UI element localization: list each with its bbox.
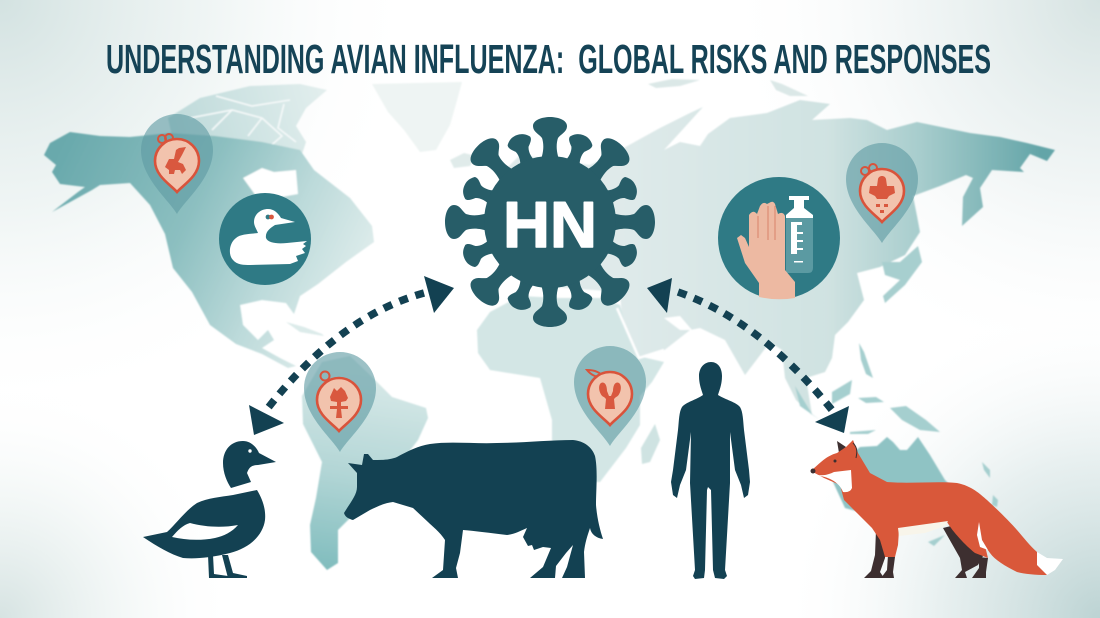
japan and korea: [882, 246, 922, 303]
vial: [786, 196, 813, 273]
africa: [477, 296, 664, 482]
hand: [737, 202, 795, 299]
arrow: virus to fox: [647, 278, 849, 433]
eurasia: [495, 100, 1055, 415]
white tail stripe: [977, 522, 988, 550]
marker: [587, 370, 632, 425]
icon: bird in circle: [219, 193, 311, 285]
arctic canada: [168, 84, 327, 160]
red sea: [617, 308, 664, 358]
new zealand and tasmania: [928, 462, 998, 546]
white tail tip: [1037, 552, 1063, 575]
pin: africa: [574, 346, 646, 446]
virus label: HN: [503, 188, 597, 261]
marker: [155, 134, 199, 192]
human: [671, 362, 750, 579]
madagascar: [641, 424, 660, 464]
white chest: [814, 470, 852, 492]
pin: north america: [141, 114, 213, 214]
hudson bay: [243, 168, 298, 198]
pin: south america: [304, 352, 376, 452]
marker: [317, 372, 361, 431]
arrow: virus to duck: [249, 276, 454, 435]
fox eye: [834, 460, 836, 462]
north america: [44, 132, 374, 368]
greenland: [372, 82, 462, 152]
icon: hand and vaccine vial: [718, 177, 840, 299]
duck: [143, 441, 276, 578]
white belly: [898, 521, 948, 536]
caribbean islands: [286, 322, 324, 336]
pin: asia: [846, 143, 918, 243]
australia: [833, 437, 965, 520]
marker: [860, 164, 904, 222]
fox: [810, 440, 1063, 578]
south america: [302, 356, 428, 570]
britain: [450, 153, 476, 168]
virus: [445, 117, 655, 327]
fox ears: [837, 441, 846, 453]
world map: [44, 79, 1055, 570]
persian gulf: [664, 316, 692, 330]
fox nose: [810, 468, 816, 474]
indonesia and philippines: [795, 343, 940, 434]
dark legs: [864, 525, 988, 578]
arctic channels: [190, 96, 296, 148]
cow: [344, 440, 603, 578]
arctic russian islands: [648, 79, 808, 96]
